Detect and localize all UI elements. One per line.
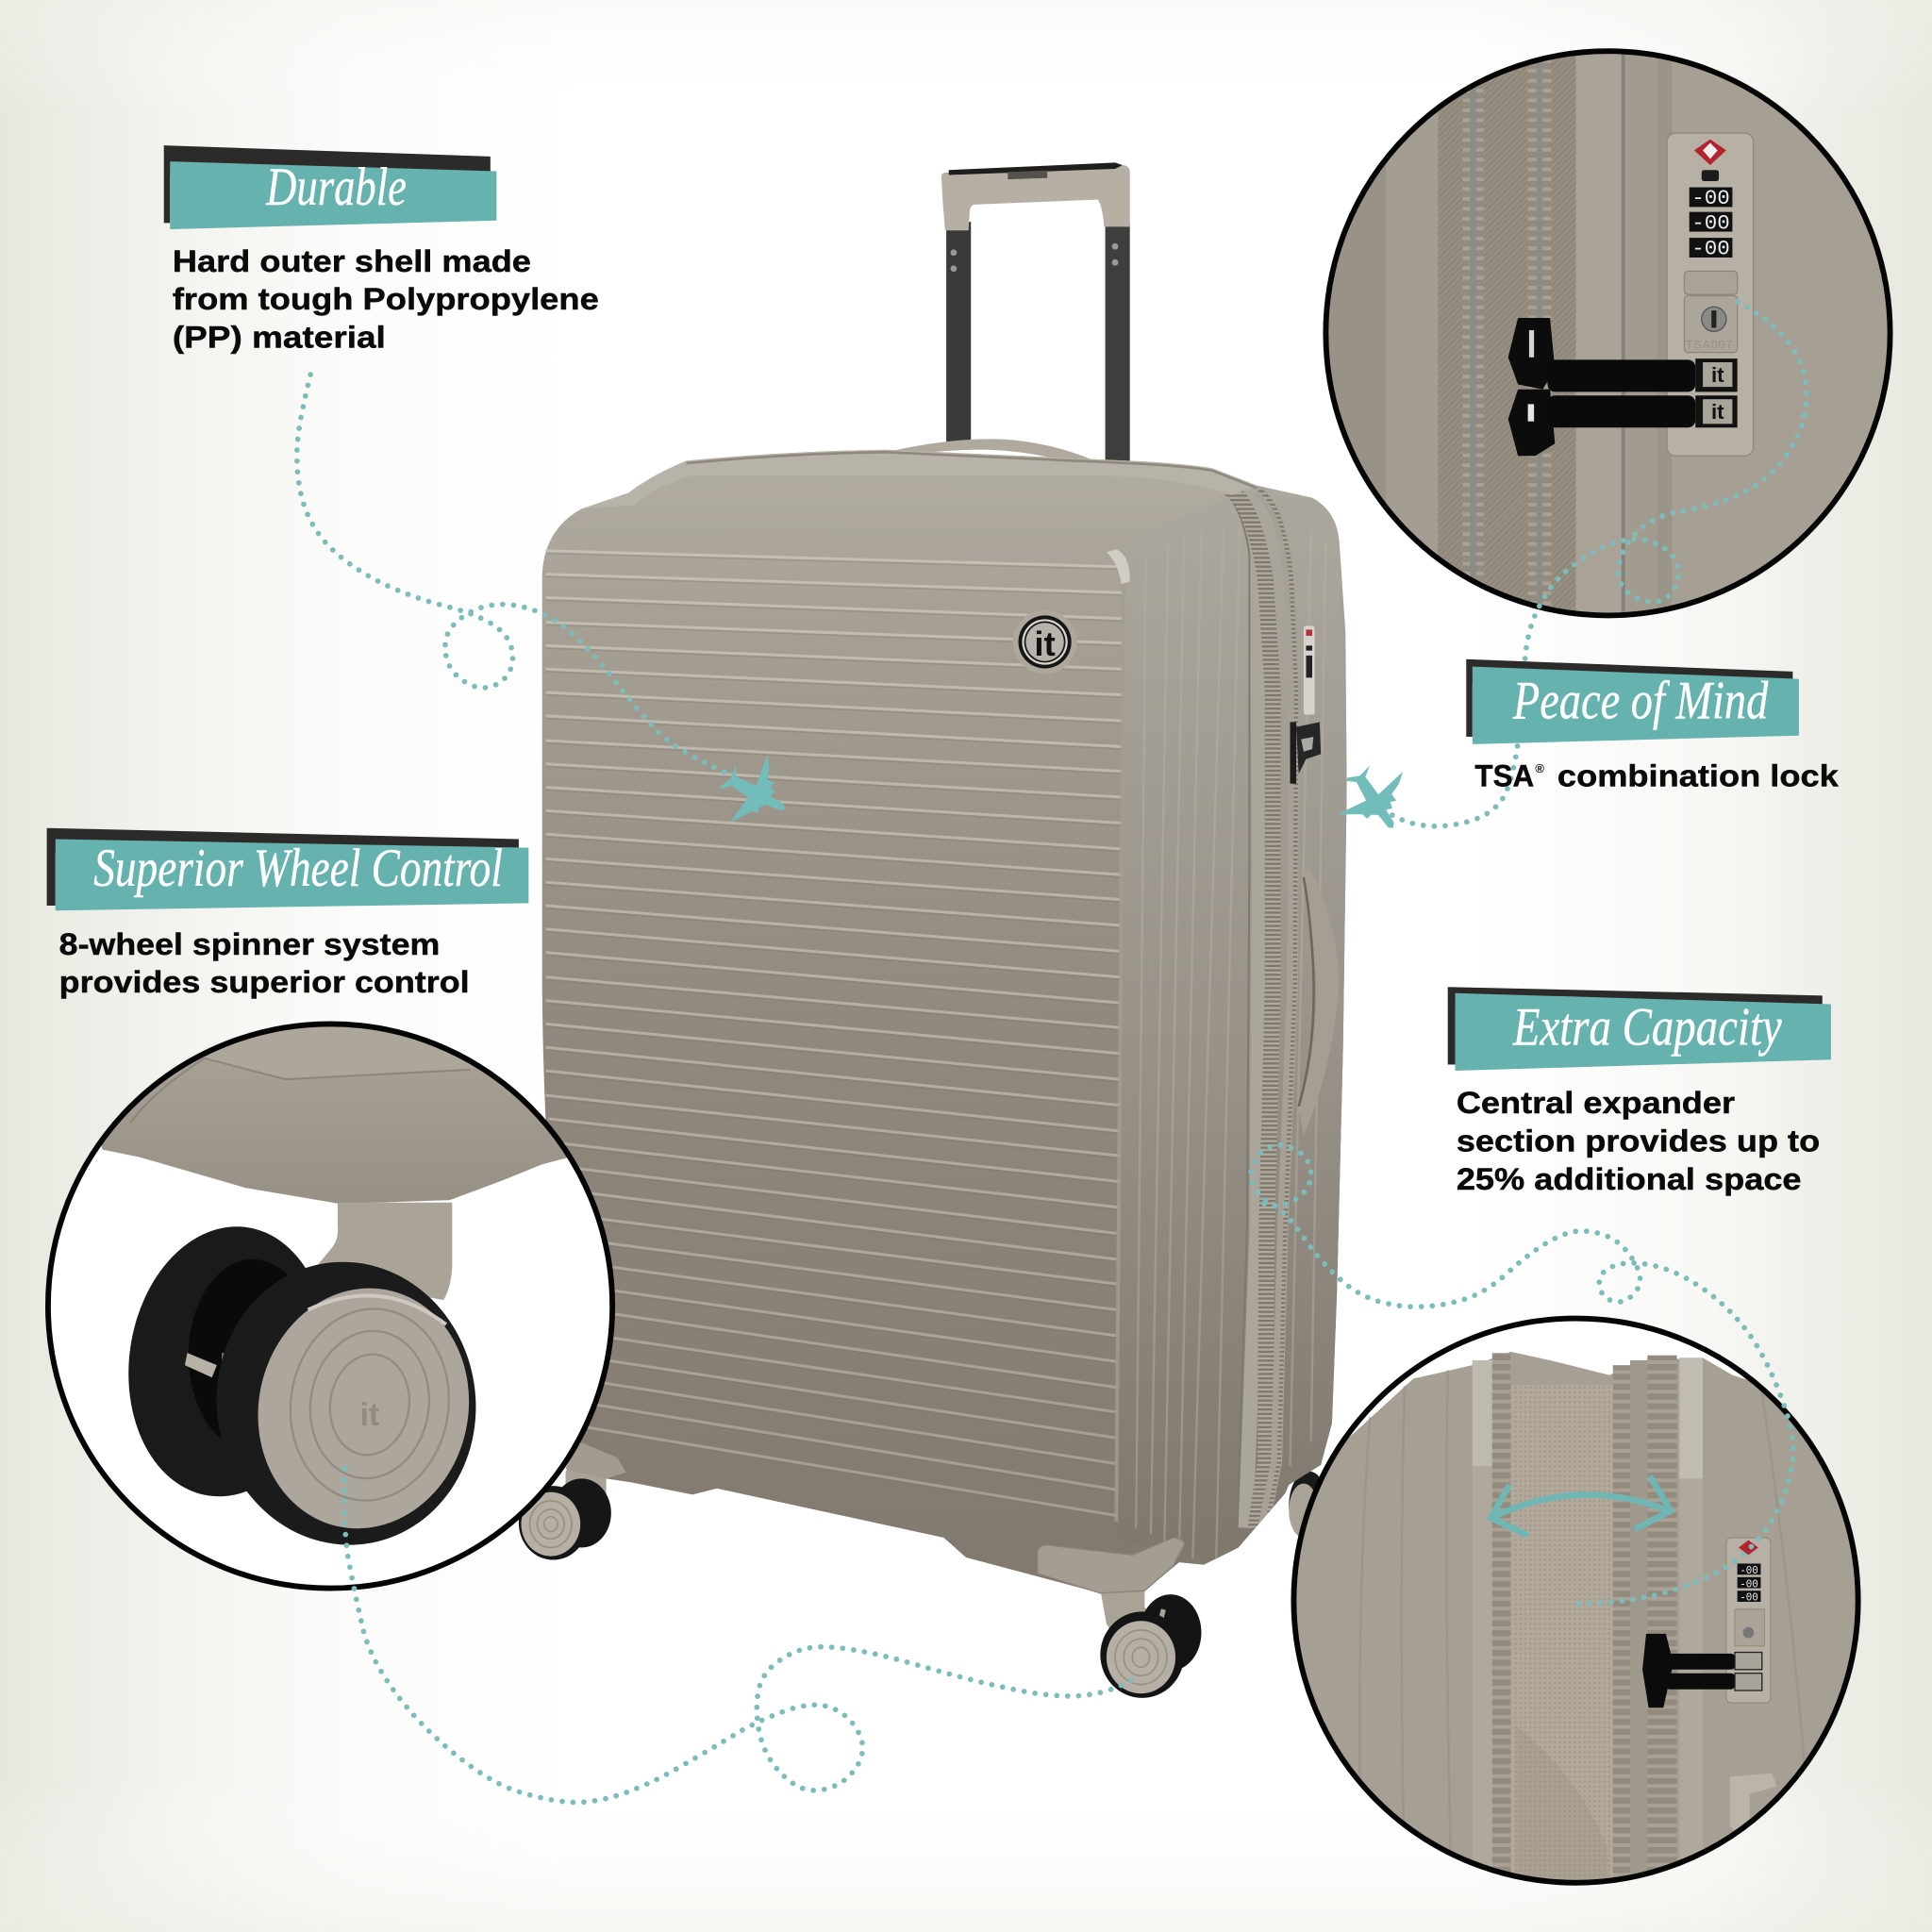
text: extra capacity	[1457, 1086, 1820, 1196]
zipper pulls	[1508, 318, 1738, 456]
rear wheel	[128, 1226, 306, 1496]
detail circle: spinner wheels	[48, 1010, 612, 1589]
rear-right wheel	[1289, 1472, 1328, 1541]
text: extra capacity: section provides up to	[1457, 1124, 1820, 1158]
front-right wheel	[1100, 1590, 1201, 1698]
key cylinder	[1702, 307, 1726, 331]
banner: peace of mind: Peace of Mind	[1512, 671, 1769, 730]
combination wheels: -00	[1691, 238, 1730, 261]
text: extra capacity: Central expander	[1457, 1086, 1735, 1120]
banner: extra capacity	[1448, 987, 1831, 1071]
combination wheels: -00	[1691, 187, 1730, 210]
TSA diamond	[1694, 140, 1726, 165]
expansion arrow	[1491, 1476, 1671, 1535]
text: durable: from tough Polypropylene	[173, 282, 599, 316]
light bands	[1472, 1360, 1492, 1867]
text: extra capacity: 25% additional space	[1457, 1162, 1802, 1196]
front wheel cap	[258, 1289, 470, 1528]
text: wheel control	[59, 927, 470, 999]
lock plate small: -00	[1740, 1591, 1758, 1605]
brand logo	[1013, 610, 1077, 674]
telescopic handle	[941, 162, 1130, 466]
dotted route: durable	[297, 375, 728, 774]
dotted route: peace of mind	[1374, 302, 1807, 826]
suitcase body shell	[542, 450, 1347, 1593]
callout: extra capacity	[1448, 987, 1831, 1196]
corner highlight	[1107, 550, 1130, 584]
icon: plane near side	[1330, 750, 1419, 841]
banner: wheel control: Superior Wheel Control	[93, 839, 503, 898]
zipper teeth	[1228, 488, 1273, 1528]
dotted route: wheels	[344, 1469, 1139, 1803]
combination wheels	[1690, 187, 1732, 261]
lock plate small: -00	[1740, 1577, 1758, 1591]
lock plate small: -00	[1740, 1564, 1758, 1577]
zipper seam	[1214, 483, 1249, 1562]
callout: superior wheel control	[47, 828, 528, 999]
case underside	[102, 1058, 567, 1204]
front panel right edge	[1116, 564, 1124, 1522]
zipper pulls small	[1642, 1634, 1762, 1707]
detail circle: expander section	[1281, 1319, 1885, 1897]
banner: durable	[164, 145, 496, 229]
text: wheel control: 8-wheel spinner system	[59, 927, 440, 961]
case body	[1296, 1351, 1856, 1877]
carry handle	[886, 439, 1091, 466]
callout: durable	[164, 145, 599, 354]
side carry handle	[1299, 866, 1339, 1136]
side lock	[1291, 626, 1321, 784]
zipper pulls: it	[1711, 400, 1724, 424]
side handle fragment	[1730, 1774, 1777, 1830]
front panel ribs	[546, 551, 1123, 1518]
text: wheel control: provides superior control	[59, 965, 470, 999]
zipper pulls: it	[1711, 363, 1724, 387]
corner guard right	[1038, 1538, 1184, 1593]
banner: peace of mind	[1466, 659, 1799, 744]
text: peace of mind: combination lock	[1557, 758, 1839, 792]
text: durable: (PP) material	[173, 320, 386, 354]
side panel	[1115, 483, 1349, 1565]
lock plate: TSA007	[1686, 339, 1733, 352]
text: peace of mind: ®	[1535, 761, 1544, 775]
text: peace of mind: TSA	[1474, 758, 1534, 792]
top rim highlight	[581, 450, 1257, 508]
top seam	[687, 452, 1257, 488]
corner guard left	[566, 1441, 626, 1478]
text: durable	[173, 244, 599, 354]
dotted route: capacity	[1251, 1145, 1793, 1605]
lock plate small	[1726, 1538, 1771, 1703]
text: durable: Hard outer shell made	[173, 244, 531, 278]
text: peace of mind	[1474, 758, 1839, 792]
detail circle: combination lock	[1319, 37, 1894, 628]
banner: wheel control	[47, 828, 528, 910]
zip bands	[1492, 1353, 1510, 1895]
suitcase	[519, 162, 1349, 1698]
front-left wheel	[519, 1466, 611, 1560]
icon: plane on suitcase	[721, 755, 785, 823]
banner: extra capacity: Extra Capacity	[1512, 998, 1782, 1058]
banner: durable: Durable	[265, 158, 407, 217]
combination wheels: -00	[1691, 211, 1730, 235]
callout: peace of mind	[1466, 659, 1839, 792]
wheel stem	[314, 1203, 452, 1300]
lock plate	[1667, 133, 1754, 456]
front wheel tyre	[217, 1262, 475, 1545]
mesh gusset	[1509, 1385, 1613, 1897]
wheel brand: it	[359, 1397, 379, 1433]
brand logo: it	[1034, 625, 1056, 663]
